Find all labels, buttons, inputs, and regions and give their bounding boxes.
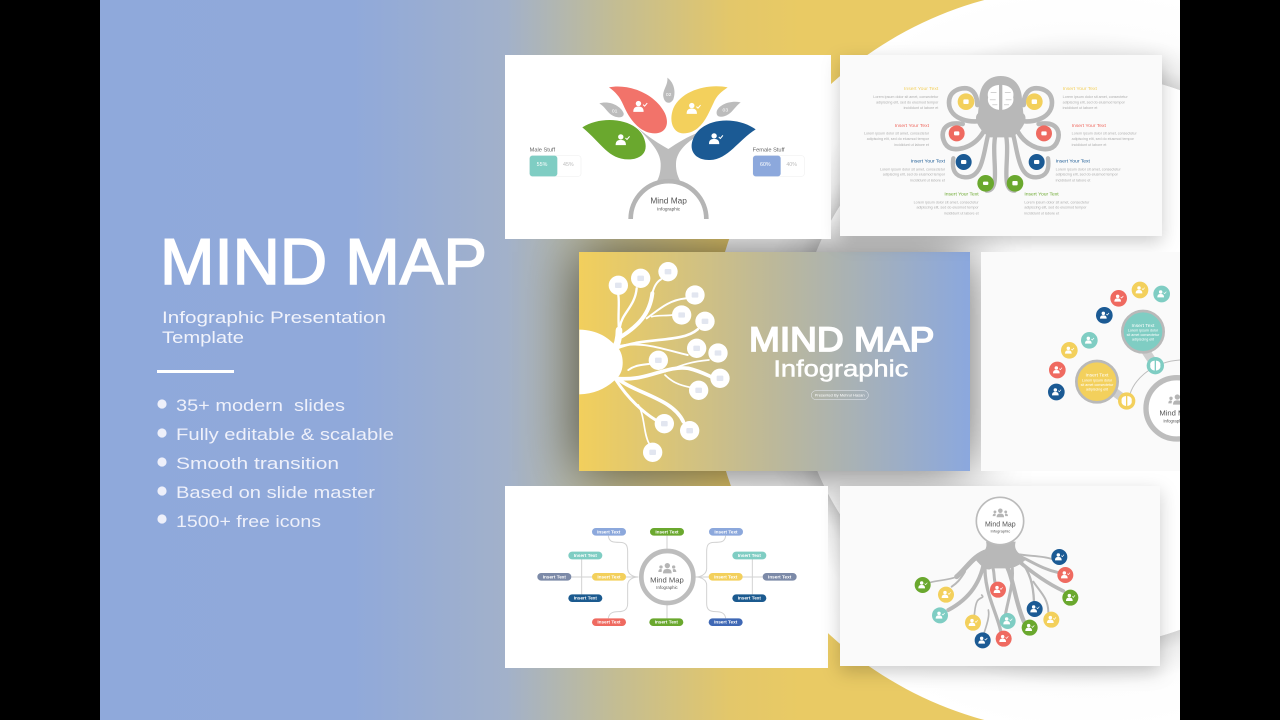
- feature list: [157, 396, 394, 531]
- center label: [650, 195, 687, 212]
- right text items: Lorem ipsum dolor sit amet, consectetur: [1063, 95, 1128, 99]
- pills: Insert Text: [738, 596, 761, 601]
- right text items: Lorem ipsum dolor sit amet, consectetur: [1024, 200, 1090, 204]
- left text items: Insert Your Text: [904, 86, 939, 92]
- panel: right circles slide: [981, 252, 1180, 471]
- pills: Insert Text: [714, 529, 738, 534]
- left text items: adipiscing elit, sed do eiusmod tempor: [883, 173, 946, 177]
- teal bubble: sit amet consectetur: [1127, 333, 1160, 337]
- yellow bubble: sit amet consectetur: [1081, 383, 1114, 387]
- hub: [976, 497, 1024, 545]
- icon circles: [949, 93, 1052, 192]
- male stat: 45%: [563, 162, 574, 168]
- right text items: adipiscing elit, sed do eiusmod tempor: [1024, 206, 1087, 210]
- panel: center title slide: [579, 252, 970, 471]
- pills: Insert Text: [597, 574, 621, 579]
- pills: Insert Text: [655, 620, 678, 625]
- pills: Insert Text: [597, 529, 621, 534]
- center hub: [1143, 375, 1180, 442]
- teal bubble: Insert Text: [1132, 323, 1155, 329]
- right text items: Insert Your Text: [1024, 192, 1059, 198]
- connectors: [571, 536, 763, 618]
- right text items: adipiscing elit, sed do eiusmod tempor: [1056, 173, 1119, 177]
- brain: [988, 85, 1014, 110]
- pills: Insert Text: [655, 529, 679, 534]
- teal bubble: adipiscing elit: [1132, 338, 1154, 342]
- left text items: incididunt ut labore et: [894, 143, 929, 147]
- panel: tree slide: [505, 55, 831, 239]
- icon nodes: [609, 262, 730, 462]
- leaves: [582, 78, 756, 160]
- feature list: Fully editable & scalable: [176, 425, 394, 444]
- left text items: Insert Your Text: [895, 123, 930, 129]
- brain nodes: [1118, 357, 1164, 410]
- panel: hub and spoke slide: [505, 486, 828, 668]
- feature list: 35+ modern slides: [176, 396, 345, 415]
- panel: octopus slide: [840, 55, 1162, 236]
- feature list: Smooth transition: [176, 454, 339, 473]
- octopus: [943, 76, 1059, 191]
- male stat: 55%: [537, 162, 548, 168]
- right text items: incididunt ut labore et: [1024, 212, 1059, 216]
- hub: Mind Map: [985, 521, 1016, 528]
- right text items: incididunt ut labore et: [1056, 179, 1090, 183]
- subtitle: [162, 308, 386, 347]
- yellow bubble: adipiscing elit: [1086, 388, 1108, 392]
- title: MIND MAP: [749, 321, 934, 359]
- leaf icons: [616, 101, 723, 145]
- left text items: Insert Your Text: [944, 192, 979, 198]
- female stat: [753, 148, 804, 176]
- feature list: 1500+ free icons: [176, 512, 321, 531]
- right text items: adipiscing elit, sed do eiusmod tempor: [1072, 137, 1135, 141]
- left text items: incididunt ut labore et: [910, 179, 945, 183]
- person nodes: [915, 549, 1078, 648]
- pills: Insert Text: [714, 574, 738, 579]
- right text items: Lorem ipsum dolor sit amet, consectetur: [1072, 132, 1137, 136]
- tree trunk: [638, 128, 700, 183]
- roots: [931, 542, 1063, 633]
- hub: Mind Map: [650, 575, 684, 584]
- subtitle: Template: [162, 328, 244, 347]
- leaf numbers: 02: [666, 92, 672, 98]
- female stat: 60%: [760, 162, 771, 168]
- pills: Insert Text: [714, 620, 738, 625]
- left text items: [864, 86, 979, 216]
- left text items: adipiscing elit, sed do eiusmod tempor: [916, 206, 979, 210]
- right text items: Lorem ipsum dolor sit amet, consectetur: [1056, 167, 1121, 171]
- subtitle: Infographic Presentation: [162, 308, 386, 327]
- center hub: Infographic: [1163, 418, 1186, 423]
- white tree: [579, 279, 711, 443]
- left text items: Lorem ipsum dolor sit amet, consectetur: [864, 132, 930, 136]
- yellow bubble: Lorem ipsum dolor: [1082, 378, 1113, 382]
- female stat: 40%: [786, 162, 797, 168]
- right black bar: [1180, 0, 1280, 720]
- right text items: Insert Your Text: [1063, 86, 1098, 92]
- left text items: Lorem ipsum dolor sit amet, consectetur: [914, 200, 979, 204]
- hub: [641, 551, 693, 603]
- teal bubble: [1122, 311, 1164, 352]
- hub: Infographic: [990, 529, 1010, 534]
- pills: Insert Text: [597, 620, 621, 625]
- hub: Infographic: [656, 585, 679, 590]
- thin arc: [1130, 360, 1180, 394]
- presenter pill: [811, 391, 868, 400]
- left text items: incididunt ut labore et: [904, 106, 938, 110]
- subtitle: Infographic: [773, 356, 908, 382]
- left text items: incididunt ut labore et: [944, 212, 979, 216]
- teal bubble: Lorem ipsum dolor: [1128, 328, 1159, 332]
- faint node icons: [615, 269, 723, 455]
- yellow bubble: [1076, 361, 1118, 402]
- yellow bubble: Insert Text: [1086, 373, 1109, 379]
- main title: MIND MAP: [160, 225, 487, 298]
- left text items: adipiscing elit, sed do eiusmod tempor: [867, 137, 930, 141]
- right text items: adipiscing elit, sed do eiusmod tempor: [1063, 100, 1126, 104]
- leaf numbers: 01: [612, 108, 618, 114]
- leaf numbers: [612, 92, 728, 114]
- left text items: adipiscing elit, sed do eiusmod tempor: [876, 100, 939, 104]
- pills: Insert Text: [738, 553, 761, 558]
- pills: Insert Text: [574, 553, 597, 558]
- pills: Insert Text: [574, 596, 597, 601]
- right text items: incididunt ut labore et: [1072, 143, 1106, 147]
- leaf numbers: 03: [723, 107, 728, 113]
- left text items: Lorem ipsum dolor sit amet, consectetur: [880, 167, 946, 171]
- feature list: Based on slide master: [176, 483, 375, 502]
- small person nodes: [1048, 282, 1170, 400]
- pills: Insert Text: [543, 574, 566, 579]
- panel: roots slide: [840, 486, 1160, 666]
- left text items: Lorem ipsum dolor sit amet, consectetur: [873, 95, 939, 99]
- presenter pill: Presented By Mehrul Hasan: [815, 393, 865, 398]
- left text block: [157, 225, 487, 531]
- pills: [537, 528, 797, 626]
- left text items: Insert Your Text: [911, 159, 946, 165]
- right text items: [1024, 86, 1137, 216]
- center label: Mind Map: [650, 195, 687, 205]
- divider line: [157, 370, 234, 373]
- connectors: [1112, 350, 1155, 401]
- base arc: [631, 181, 706, 219]
- male stat: [530, 148, 581, 176]
- right text items: Insert Your Text: [1072, 123, 1107, 129]
- center hub: Mind Map: [1159, 409, 1193, 418]
- pills: Insert Text: [768, 574, 792, 579]
- center label: Infographic: [657, 207, 681, 212]
- right text items: incididunt ut labore et: [1063, 106, 1097, 110]
- male stat: Male Stuff: [530, 148, 555, 154]
- female stat: Female Stuff: [753, 148, 785, 154]
- right text items: Insert Your Text: [1056, 159, 1091, 165]
